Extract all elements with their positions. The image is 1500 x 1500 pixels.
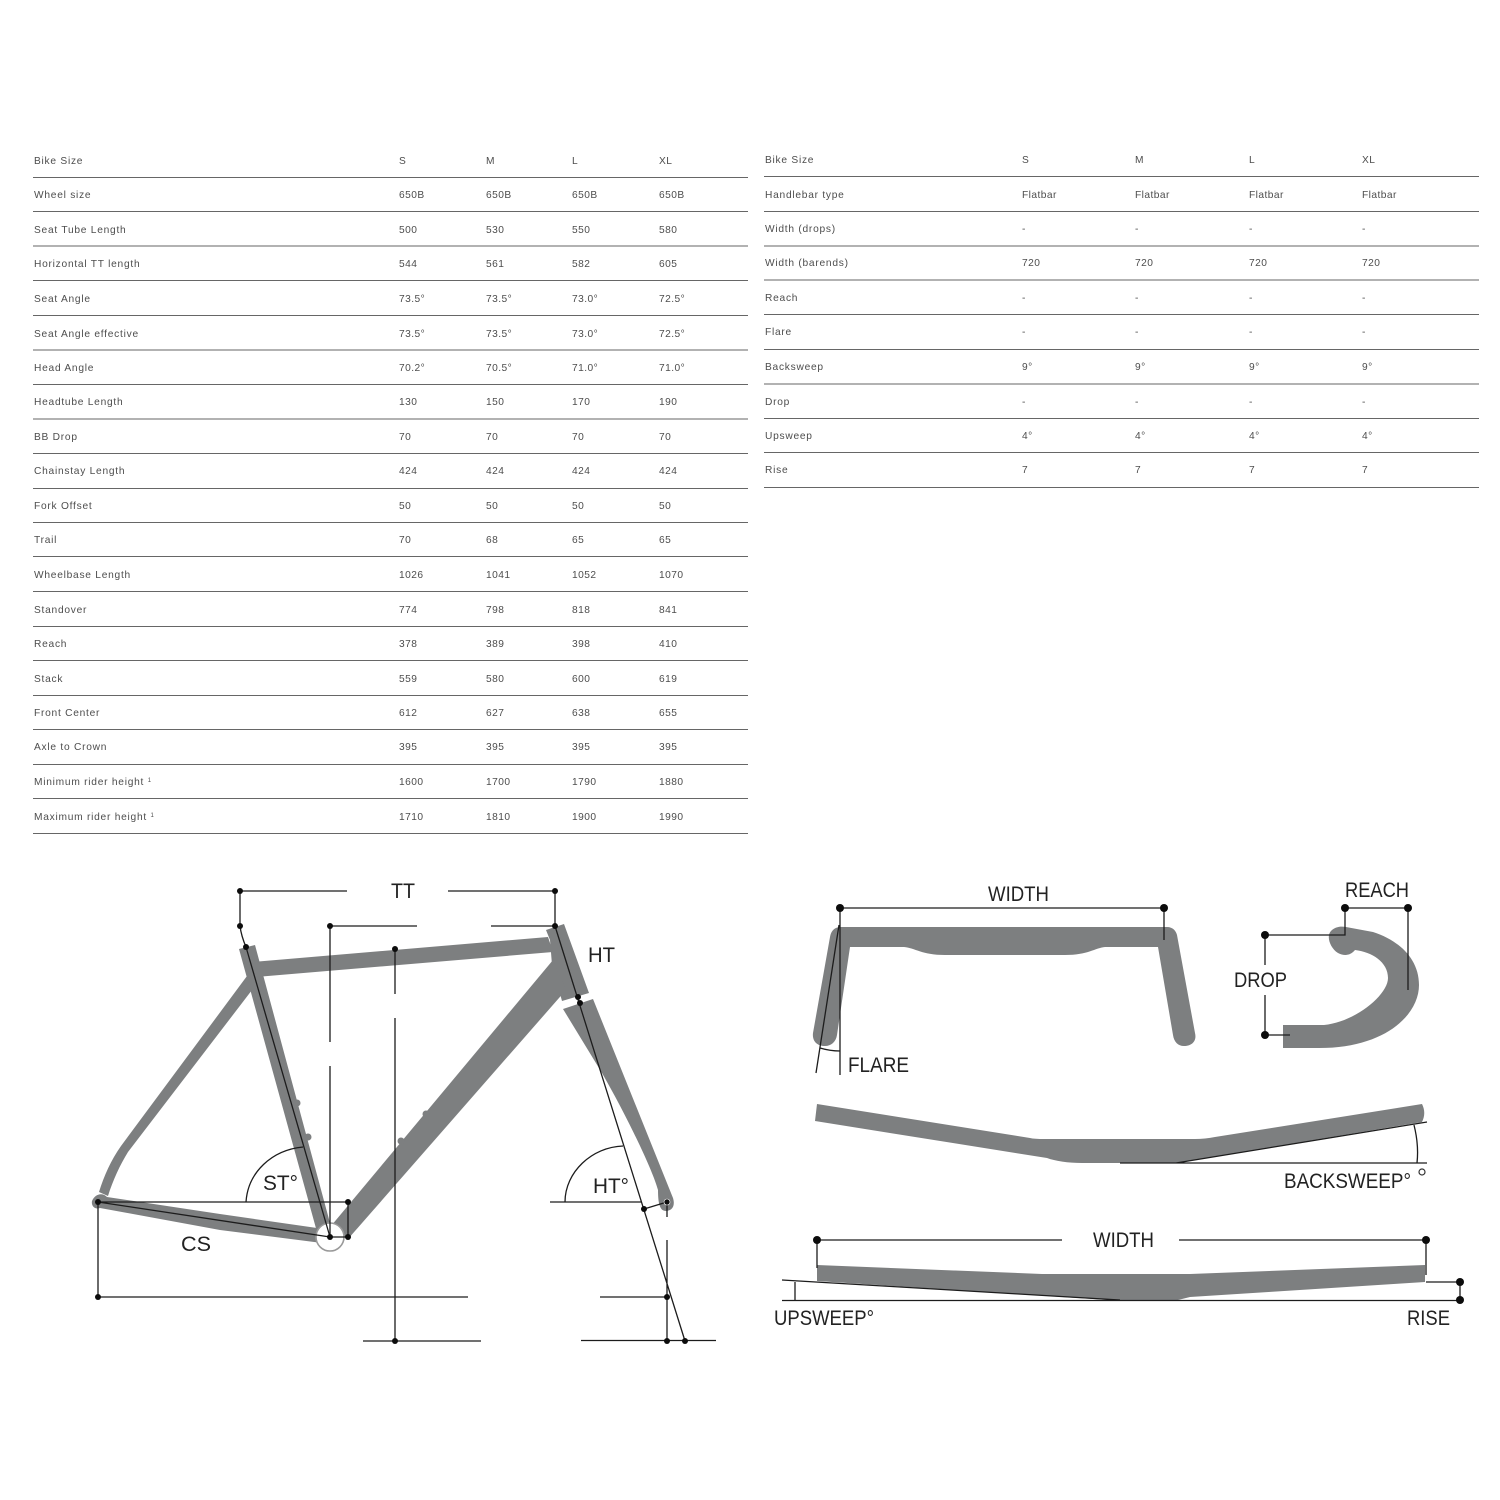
row: handlebar type: Flatbar	[1362, 190, 1397, 201]
row: upsweep: 4°	[1022, 431, 1033, 442]
diagram: flat bar width, upsweep and rise	[774, 1229, 1464, 1330]
row: reach: 378	[399, 639, 417, 650]
row: front center	[33, 708, 748, 730]
header row: L	[1249, 155, 1255, 166]
header row: XL	[659, 156, 672, 167]
row: seat tube length: 580	[659, 225, 677, 236]
row: BB drop	[33, 432, 748, 454]
row: chainstay length: 424	[659, 466, 677, 477]
row: width barends: 720	[1362, 258, 1380, 269]
row: drop: Drop	[765, 397, 790, 408]
row: fork offset: Fork Offset	[34, 501, 92, 512]
row: head angle	[33, 363, 748, 384]
row: horizontal TT length: Horizontal TT length	[34, 259, 140, 270]
row: horizontal TT length: 544	[399, 259, 417, 270]
row: drop: -	[1135, 397, 1139, 408]
row: front center: 655	[659, 708, 677, 719]
row: flare: -	[1249, 327, 1253, 338]
row: minimum rider height: Minimum rider height	[34, 777, 144, 788]
diagram: flat bar backsweep	[815, 1104, 1427, 1193]
measurement points	[813, 1236, 1464, 1304]
row: maximum rider height: 1710	[399, 812, 423, 823]
label: CS: CS	[181, 1233, 211, 1256]
row: reach: -	[1135, 293, 1139, 304]
row: backsweep: Backsweep	[765, 362, 824, 373]
row: axle to crown: 395	[659, 742, 677, 753]
row: width barends: 720	[1249, 258, 1267, 269]
row: headtube length: 190	[659, 397, 677, 408]
width and flare lines	[816, 908, 1164, 1075]
row: trail: 65	[572, 535, 584, 546]
label: TT: TT	[391, 880, 415, 903]
row: trail: Trail	[34, 535, 57, 546]
row: seat angle: 73.0°	[572, 294, 598, 305]
row: BB drop: 70	[399, 432, 411, 443]
row: backsweep	[764, 362, 1479, 384]
row: axle to crown: 395	[572, 742, 590, 753]
row: chainstay length: 424	[399, 466, 417, 477]
row: reach: 410	[659, 639, 677, 650]
row: standover: Standover	[34, 605, 87, 616]
row: rise: Rise	[765, 465, 788, 476]
row: standover	[33, 605, 748, 626]
row: upsweep	[764, 431, 1479, 452]
row: seat angle effective: 73.5°	[399, 329, 425, 340]
row: upsweep: 4°	[1135, 431, 1146, 442]
measurement lines	[98, 891, 716, 1341]
label: HT angle: HT°	[593, 1175, 629, 1198]
row: BB drop: 70	[659, 432, 671, 443]
row: headtube length: 150	[486, 397, 504, 408]
reach and drop lines	[1265, 908, 1408, 1035]
row: BB drop: 70	[572, 432, 584, 443]
measurement points	[95, 888, 688, 1344]
row: width drops: -	[1135, 224, 1139, 235]
row: upsweep: Upsweep	[765, 431, 813, 442]
row: standover: 798	[486, 605, 504, 616]
row: BB drop: BB Drop	[34, 432, 78, 443]
header row	[764, 155, 1479, 176]
row: head angle: 70.5°	[486, 363, 512, 374]
header row: Bike Size	[34, 156, 83, 167]
row: standover: 774	[399, 605, 417, 616]
row: maximum rider height: 1900	[572, 812, 596, 823]
degree mark	[1419, 1169, 1425, 1175]
row: fork offset: 50	[659, 501, 671, 512]
row: horizontal TT length	[33, 259, 748, 280]
label: drop: DROP	[1234, 969, 1287, 992]
row: reach	[764, 293, 1479, 314]
row: minimum rider height: 1600	[399, 777, 423, 788]
row: headtube length	[33, 397, 748, 419]
row: rise: 7	[1362, 465, 1368, 476]
row: chainstay length: 424	[486, 466, 504, 477]
bar shape	[817, 1265, 1425, 1300]
row: flare: Flare	[765, 327, 792, 338]
row: front center: Front Center	[34, 708, 100, 719]
row: wheelbase length: 1052	[572, 570, 596, 581]
row: drop: -	[1249, 397, 1253, 408]
row: backsweep: 9°	[1022, 362, 1033, 373]
diagram: bike frame geometry	[92, 880, 716, 1344]
row: seat tube length: 500	[399, 225, 417, 236]
row: wheel size: Wheel size	[34, 190, 91, 201]
row: minimum rider height	[33, 777, 748, 798]
row: seat tube length	[33, 225, 748, 246]
row: wheelbase length: Wheelbase Length	[34, 570, 131, 581]
row: front center: 627	[486, 708, 504, 719]
row: wheel size	[33, 190, 748, 212]
row: head angle: 71.0°	[659, 363, 685, 374]
row: standover: 841	[659, 605, 677, 616]
row: axle to crown: Axle to Crown	[34, 742, 107, 753]
row: stack: 580	[486, 674, 504, 685]
row: upsweep: 4°	[1249, 431, 1260, 442]
row: rise	[764, 465, 1479, 488]
backsweep lines	[1120, 1122, 1427, 1163]
row: seat angle	[33, 294, 748, 316]
row: rise: 7	[1249, 465, 1255, 476]
row: horizontal TT length: 605	[659, 259, 677, 270]
row: upsweep: 4°	[1362, 431, 1373, 442]
row: drop	[764, 397, 1479, 418]
frame silhouette	[92, 924, 674, 1243]
row: flare: -	[1022, 327, 1026, 338]
row: seat tube length: Seat Tube Length	[34, 225, 126, 236]
row: width barends	[764, 258, 1479, 280]
row: seat angle: Seat Angle	[34, 294, 91, 305]
row: stack	[33, 674, 748, 696]
row: width barends: 720	[1022, 258, 1040, 269]
row: seat angle: 72.5°	[659, 294, 685, 305]
row: width drops	[764, 224, 1479, 246]
row: backsweep: 9°	[1249, 362, 1260, 373]
header row: S	[399, 156, 406, 167]
row: chainstay length: Chainstay Length	[34, 466, 125, 477]
row: fork offset: 50	[572, 501, 584, 512]
row: handlebar type	[764, 190, 1479, 212]
row: maximum rider height: Maximum rider height	[34, 812, 147, 823]
row: seat angle: 73.5°	[399, 294, 425, 305]
header row: L	[572, 156, 578, 167]
bar shape	[813, 927, 1195, 1046]
row: front center: 612	[399, 708, 417, 719]
row: seat angle effective: 72.5°	[659, 329, 685, 340]
row: reach: Reach	[34, 639, 67, 650]
label: reach: REACH	[1345, 879, 1409, 902]
row: seat tube length: 550	[572, 225, 590, 236]
row: trail	[33, 535, 748, 556]
row: maximum rider height: 1990	[659, 812, 683, 823]
row: drop: -	[1362, 397, 1366, 408]
row: headtube length: 130	[399, 397, 417, 408]
row: reach: -	[1362, 293, 1366, 304]
row: fork offset	[33, 501, 748, 522]
row: chainstay length	[33, 466, 748, 488]
row: wheel size: 650B	[399, 190, 425, 201]
row: fork offset: 50	[399, 501, 411, 512]
label: rise: RISE	[1407, 1307, 1450, 1330]
diagram: drop bar front view	[813, 883, 1195, 1077]
row: BB drop: 70	[486, 432, 498, 443]
row: seat angle effective: Seat Angle effective	[34, 329, 139, 340]
row: axle to crown: 395	[399, 742, 417, 753]
row: seat tube length: 530	[486, 225, 504, 236]
row: headtube length: 170	[572, 397, 590, 408]
row: width drops: -	[1022, 224, 1026, 235]
row: head angle: Head Angle	[34, 363, 94, 374]
row: width barends: Width (barends)	[765, 258, 849, 269]
header row	[33, 156, 748, 178]
row: minimum rider height: 1790	[572, 777, 596, 788]
row: maximum rider height: 1	[151, 813, 155, 819]
row: reach: 389	[486, 639, 504, 650]
row: trail: 65	[659, 535, 671, 546]
row: rise: 7	[1135, 465, 1141, 476]
row: flare: -	[1362, 327, 1366, 338]
label: ST angle: ST°	[263, 1172, 298, 1195]
row: wheelbase length: 1026	[399, 570, 423, 581]
row: width drops: -	[1249, 224, 1253, 235]
header row: Bike Size	[765, 155, 814, 166]
table: frame geometry	[33, 156, 748, 834]
row: reach: 398	[572, 639, 590, 650]
row: maximum rider height	[33, 812, 748, 834]
row: width drops: -	[1362, 224, 1366, 235]
row: wheel size: 650B	[659, 190, 685, 201]
row: reach: Reach	[765, 293, 798, 304]
label: upsweep: UPSWEEP°	[774, 1307, 874, 1330]
row: front center: 638	[572, 708, 590, 719]
row: width drops: Width (drops)	[765, 224, 836, 235]
row: wheel size: 650B	[572, 190, 598, 201]
row: wheelbase length: 1041	[486, 570, 510, 581]
table: handlebar geometry	[764, 155, 1479, 488]
row: minimum rider height: 1700	[486, 777, 510, 788]
width points	[836, 904, 1168, 912]
row: axle to crown: 395	[486, 742, 504, 753]
bottom bracket	[316, 1223, 344, 1251]
row: seat angle effective	[33, 329, 748, 350]
row: minimum rider height: 1880	[659, 777, 683, 788]
row: head angle: 71.0°	[572, 363, 598, 374]
row: chainstay length: 424	[572, 466, 590, 477]
row: minimum rider height: 1	[148, 778, 152, 784]
header row: S	[1022, 155, 1029, 166]
row: handlebar type: Flatbar	[1022, 190, 1057, 201]
header row: M	[1135, 155, 1144, 166]
row: wheel size: 650B	[486, 190, 512, 201]
row: stack: Stack	[34, 674, 63, 685]
row: backsweep: 9°	[1362, 362, 1373, 373]
row: handlebar type: Flatbar	[1249, 190, 1284, 201]
row: seat angle effective: 73.5°	[486, 329, 512, 340]
row: drop: -	[1022, 397, 1026, 408]
row: fork offset: 50	[486, 501, 498, 512]
row: width barends: 720	[1135, 258, 1153, 269]
row: headtube length: Headtube Length	[34, 397, 123, 408]
row: handlebar type: Handlebar type	[765, 190, 845, 201]
row: reach: -	[1022, 293, 1026, 304]
row: standover: 818	[572, 605, 590, 616]
row: handlebar type: Flatbar	[1135, 190, 1170, 201]
reach and drop points	[1261, 904, 1412, 1039]
row: reach	[33, 639, 748, 660]
row: maximum rider height: 1810	[486, 812, 510, 823]
bar shape	[815, 1104, 1424, 1163]
width, upsweep and rise lines	[782, 1240, 1460, 1300]
row: wheelbase length	[33, 570, 748, 592]
header row: XL	[1362, 155, 1375, 166]
row: seat angle: 73.5°	[486, 294, 512, 305]
row: stack: 559	[399, 674, 417, 685]
row: flare	[764, 327, 1479, 350]
row: stack: 600	[572, 674, 590, 685]
row: trail: 70	[399, 535, 411, 546]
row: flare: -	[1135, 327, 1139, 338]
row: horizontal TT length: 561	[486, 259, 504, 270]
row: stack: 619	[659, 674, 677, 685]
label: width: WIDTH	[988, 883, 1049, 906]
label: backsweep: BACKSWEEP°	[1284, 1170, 1411, 1193]
row: trail: 68	[486, 535, 498, 546]
row: axle to crown	[33, 742, 748, 764]
label: HT: HT	[588, 944, 615, 967]
bar shape	[1283, 927, 1419, 1048]
row: backsweep: 9°	[1135, 362, 1146, 373]
row: rise: 7	[1022, 465, 1028, 476]
label: width: WIDTH	[1093, 1229, 1154, 1252]
label: flare: FLARE	[848, 1054, 909, 1077]
row: horizontal TT length: 582	[572, 259, 590, 270]
row: wheelbase length: 1070	[659, 570, 683, 581]
diagram: drop bar side view	[1234, 879, 1419, 1048]
header row: M	[486, 156, 495, 167]
row: reach: -	[1249, 293, 1253, 304]
row: seat angle effective: 73.0°	[572, 329, 598, 340]
row: head angle: 70.2°	[399, 363, 425, 374]
